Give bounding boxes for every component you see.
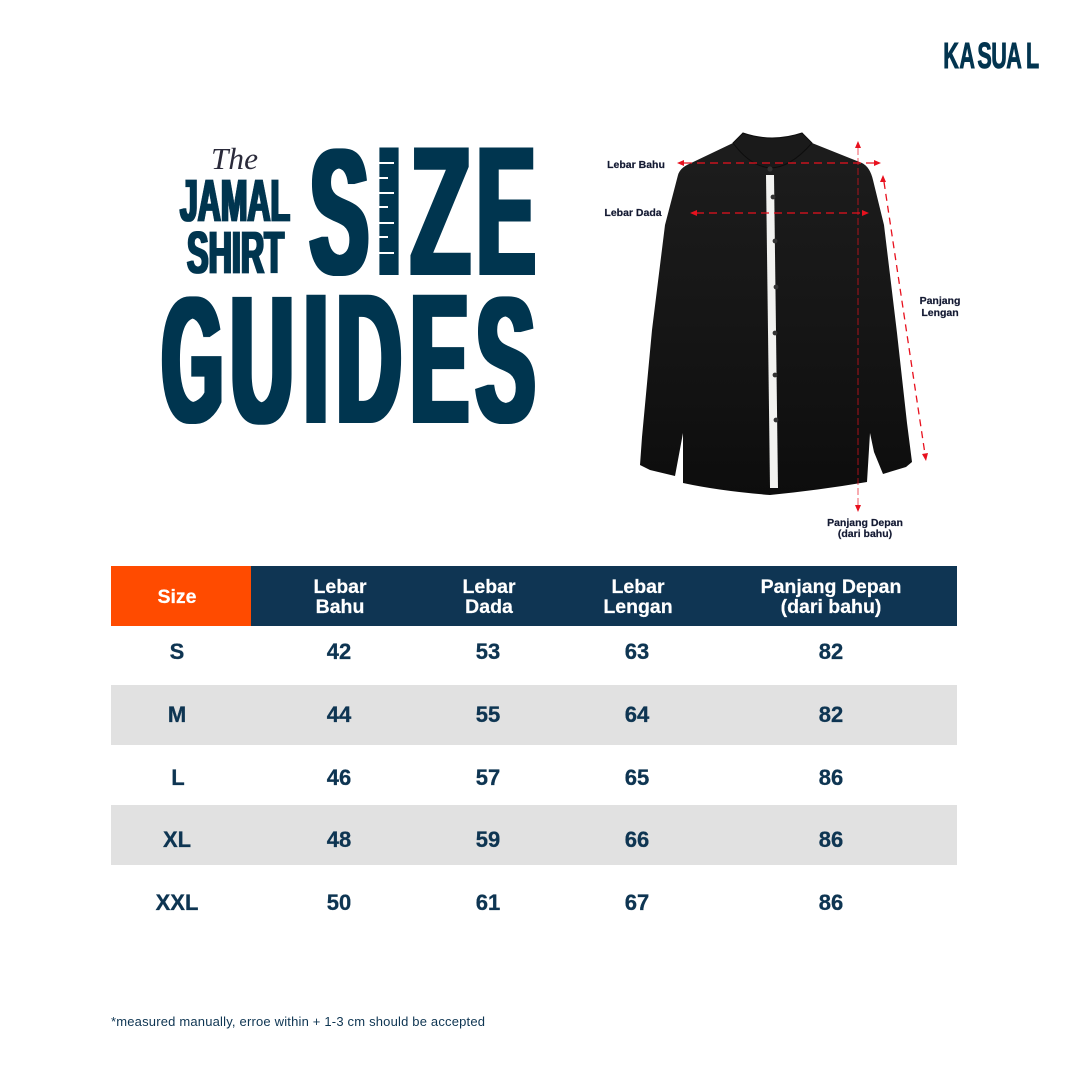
row XL: 86 (819, 827, 843, 852)
row S: S (170, 639, 184, 664)
row XL (111, 805, 957, 865)
row S: 53 (476, 639, 500, 664)
row L: 57 (476, 765, 500, 790)
table header (111, 566, 957, 626)
row M: 55 (476, 702, 500, 727)
title word: The: The (211, 141, 258, 176)
row M: 82 (819, 702, 843, 727)
shirt placket (766, 175, 778, 488)
row XXL: 86 (819, 890, 843, 915)
arrow: Lebar Dada (690, 210, 869, 216)
row L (171, 765, 843, 790)
arrow: Panjang Depan (855, 141, 861, 512)
row XL: 59 (476, 827, 500, 852)
title word: SIZE: Z (411, 108, 470, 313)
row XL: 48 (327, 827, 351, 852)
table header: Lebar (462, 576, 516, 598)
title word: GUIDES (162, 255, 535, 461)
row XXL: XXL (156, 890, 198, 915)
label: Lebar Bahu: Lebar Bahu (607, 159, 665, 171)
row XXL: 67 (625, 890, 649, 915)
row M (111, 685, 957, 745)
label: Panjang Lengan: Panjang (920, 295, 960, 307)
label: Panjang Depan: (dari bahu) (838, 528, 892, 540)
row M: 44 (327, 702, 352, 727)
footnote: *measured manually, erroe within + 1-3 cm should be accepted (111, 1014, 485, 1029)
title word: GUIDES: I (304, 255, 328, 461)
row S: 63 (625, 639, 649, 664)
title word: GUIDES: U (230, 259, 294, 461)
table header: Dada (465, 596, 513, 618)
title: The Jamal Shirt Size Guides (162, 108, 535, 461)
table header: Lebar (313, 576, 367, 598)
row L: 86 (819, 765, 843, 790)
row XXL: 61 (476, 890, 500, 915)
row L: L (171, 765, 185, 790)
table header: Size (157, 586, 197, 608)
title word: GUIDES: E (410, 255, 468, 461)
title word: SIZE: I (377, 108, 401, 313)
row XXL: 50 (327, 890, 351, 915)
row S (170, 639, 843, 664)
shirt collar (733, 133, 812, 168)
row S: 42 (327, 639, 351, 664)
title word: GUIDES: D (336, 255, 402, 461)
text: S (476, 260, 535, 460)
row S: 82 (819, 639, 843, 664)
arrow: Lebar Bahu (677, 160, 881, 166)
title word: JAMAL: JAMAL (180, 168, 290, 234)
table header: Lengan (603, 596, 673, 618)
label: Panjang Depan: Panjang Depan (827, 517, 903, 529)
title word: SIZE: S (310, 112, 368, 312)
row XXL (156, 890, 843, 915)
title word: SIZE (310, 108, 535, 313)
row L: 65 (625, 765, 649, 790)
text: E (477, 108, 535, 313)
row M: 64 (625, 702, 650, 727)
label: Lebar Dada: Lebar Dada (604, 207, 662, 219)
row L: 46 (327, 765, 351, 790)
title word: GUIDES: G (162, 260, 223, 460)
row XL: XL (163, 827, 191, 852)
title word: SHIRT: SHIRT (187, 220, 284, 286)
label: Panjang Lengan: Lengan (921, 307, 959, 319)
row M: M (168, 702, 186, 727)
arrow: Panjang Lengan (880, 175, 928, 461)
shirt buttons (767, 166, 778, 422)
shirt illustration (640, 133, 912, 495)
size table (111, 566, 957, 915)
logo: KASUAL: KASUAL (943, 36, 1039, 76)
table header: (dari bahu) (781, 596, 881, 618)
table header: Panjang Depan (761, 576, 901, 598)
table header: Lebar (611, 576, 665, 598)
row XL: 66 (625, 827, 649, 852)
table header: Bahu (316, 596, 364, 618)
